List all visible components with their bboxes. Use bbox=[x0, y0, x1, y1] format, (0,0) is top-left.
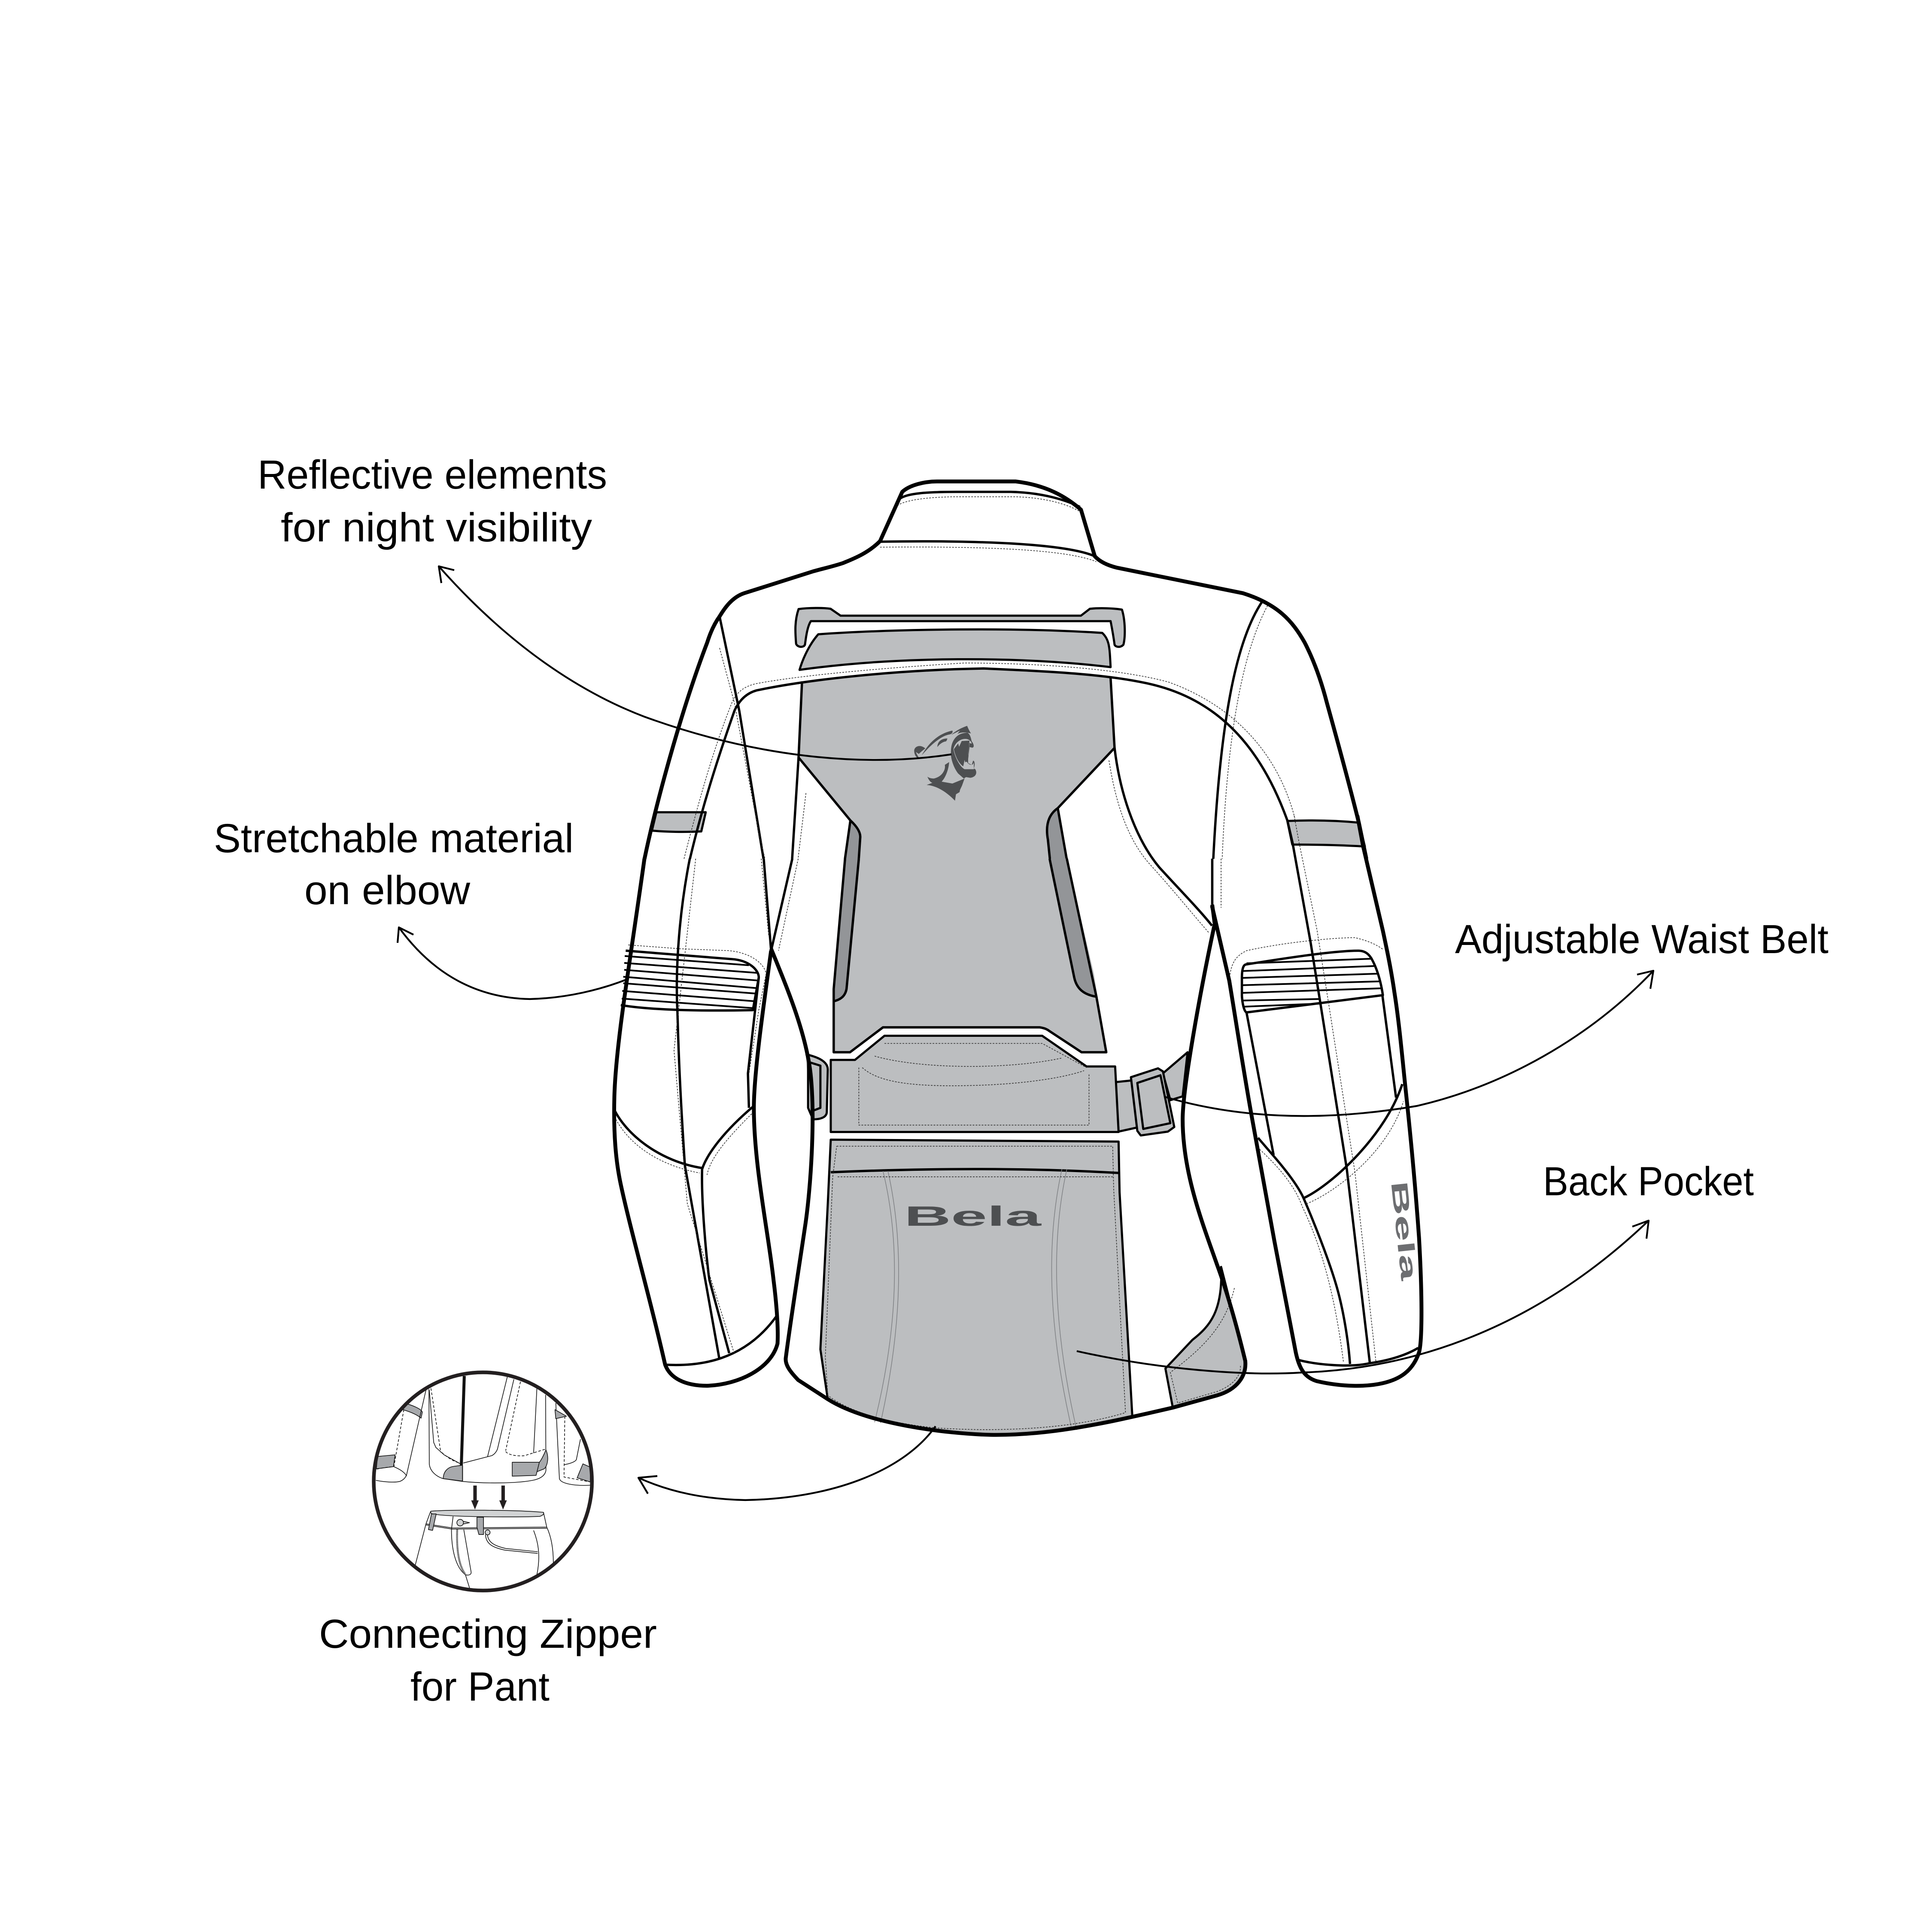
bear jaw bbox=[951, 733, 976, 778]
mini right sleeve bbox=[556, 1403, 590, 1485]
mini main zipper bbox=[461, 1376, 464, 1465]
waist belt stitching bbox=[859, 1043, 1089, 1125]
mini right strap bbox=[536, 1450, 548, 1472]
mini right sleeve stitching bbox=[564, 1416, 590, 1482]
bear head line bbox=[922, 731, 953, 755]
bear mouth interior bbox=[954, 741, 969, 766]
arrow: back pocket bbox=[1077, 1221, 1649, 1373]
right strap behind bbox=[1163, 1052, 1188, 1100]
waist belt pocket bbox=[831, 1036, 1118, 1132]
right sleeve outline bbox=[1212, 816, 1422, 1386]
zipper detail circle bbox=[374, 1372, 592, 1591]
zipper detail contents bbox=[376, 1376, 590, 1588]
mini pants zipper bbox=[457, 1530, 465, 1574]
shoulder seams bbox=[720, 601, 1263, 859]
left buckle bbox=[805, 1054, 828, 1119]
jacket upper section: collar, shoulders, yoke bbox=[644, 481, 1366, 860]
right hem stitching bbox=[1170, 1288, 1240, 1403]
mini belt buckle bbox=[512, 1462, 539, 1476]
bear tooth bbox=[963, 760, 967, 768]
right body seam stitching bbox=[1109, 760, 1209, 933]
label: stretchable material: on elbow bbox=[304, 868, 470, 913]
body outline bbox=[771, 905, 1245, 1435]
left sleeve band bbox=[652, 812, 706, 832]
pocket Bela logo: Bela bbox=[904, 1200, 1042, 1232]
yoke stitching bbox=[684, 663, 1295, 859]
left sleeve stitching bbox=[616, 859, 798, 1353]
outer outline of collar and shoulders bbox=[644, 481, 1366, 859]
label: connecting zipper: for Pant bbox=[410, 1664, 550, 1710]
label: connecting zipper: Connecting Zipper bbox=[319, 1611, 657, 1657]
arrow: reflective elements bbox=[439, 566, 951, 760]
right sleeve seams bbox=[1246, 821, 1418, 1366]
reflective hanger bar bbox=[796, 608, 1125, 647]
sleeve Bela logo: Bela bbox=[1386, 1180, 1422, 1282]
left elbow stitching bbox=[628, 945, 766, 1073]
right elbow stretch panel bbox=[1242, 951, 1383, 1012]
label: reflective elements: Reflective elements bbox=[258, 452, 607, 498]
left dark side strip bbox=[845, 820, 860, 860]
jacket back illustration bbox=[614, 481, 1422, 1435]
arrow: adjustable waist belt bbox=[1165, 971, 1653, 1116]
mini right hem patch bbox=[577, 1464, 590, 1482]
mini belt loops bbox=[428, 1514, 483, 1534]
yoke seam bbox=[690, 668, 1287, 859]
right dark side strip bbox=[1047, 808, 1066, 860]
right sleeve stitching bbox=[1260, 816, 1403, 1362]
mini jacket body bbox=[429, 1377, 546, 1483]
label: reflective elements: for night visibility bbox=[281, 505, 592, 550]
label: adjustable waist belt: Adjustable Waist Belt bbox=[1455, 917, 1829, 962]
right buckle opening bbox=[1137, 1075, 1170, 1129]
bear mouth rim bbox=[954, 739, 974, 769]
arrow: connecting zipper bbox=[638, 1426, 936, 1500]
right dark strip lower bbox=[1050, 859, 1097, 996]
back panel grey upper bbox=[799, 668, 1115, 860]
left dark strip lower bbox=[834, 859, 859, 1001]
left sleeve elbow panel bbox=[621, 951, 759, 1011]
vent panel bbox=[799, 629, 1111, 670]
mini right band bbox=[555, 1410, 566, 1419]
jacket lower section: back panel, belt, pocket, hem bbox=[614, 859, 1245, 1435]
left sleeve outline bbox=[614, 859, 778, 1386]
right stretch stripes bbox=[1242, 959, 1382, 1007]
right buckle bbox=[1131, 1068, 1174, 1136]
mini upper band left bbox=[403, 1404, 422, 1418]
mini button bbox=[457, 1519, 470, 1526]
collar stitching bbox=[880, 497, 1096, 562]
collar inner lines bbox=[880, 492, 1095, 556]
right elbow stitching bbox=[1229, 938, 1384, 981]
right side seam bbox=[1211, 859, 1213, 905]
bear ear bbox=[914, 746, 925, 759]
label: stretchable material: Stretchable material bbox=[214, 816, 574, 861]
mini pants waist opening bbox=[431, 1510, 544, 1517]
mini sleeve stitching bbox=[377, 1410, 404, 1469]
strap bbox=[1115, 1080, 1139, 1132]
back panel grey lower bbox=[834, 859, 1106, 1052]
pocket flap line bbox=[831, 1169, 1120, 1173]
right hem grey panel bbox=[1165, 1267, 1245, 1408]
bear snout bbox=[951, 726, 971, 735]
circle frame bbox=[374, 1372, 592, 1591]
mini pants outline bbox=[415, 1512, 553, 1588]
mini jacket stitching bbox=[431, 1382, 546, 1464]
right sleeve band bbox=[1287, 820, 1365, 847]
shoulder stitching bbox=[720, 605, 1267, 859]
label: back pocket: Back Pocket bbox=[1543, 1159, 1754, 1204]
mini pocket rivet bbox=[485, 1530, 490, 1535]
right body curved seam bbox=[1115, 748, 1212, 926]
mini left sleeve lines bbox=[376, 1390, 426, 1482]
bear logo bbox=[914, 726, 976, 801]
mini down arrows bbox=[471, 1485, 507, 1510]
back panel edges bbox=[799, 678, 1115, 859]
stretch stripes bbox=[622, 956, 759, 1008]
mini jacket sleeve band left bbox=[377, 1455, 395, 1469]
pocket stitching bbox=[825, 1146, 1125, 1430]
bear neck bbox=[927, 762, 965, 801]
left sleeve seams bbox=[614, 859, 792, 1365]
mini grey hem patch bbox=[443, 1465, 462, 1481]
bear brow bbox=[937, 738, 948, 747]
back pocket bbox=[820, 1139, 1133, 1435]
arrow: stretchable material bbox=[398, 927, 628, 999]
pocket seams bbox=[875, 1169, 1077, 1430]
back panel lower edges bbox=[834, 859, 1106, 1052]
right sleeve bbox=[1212, 816, 1422, 1386]
